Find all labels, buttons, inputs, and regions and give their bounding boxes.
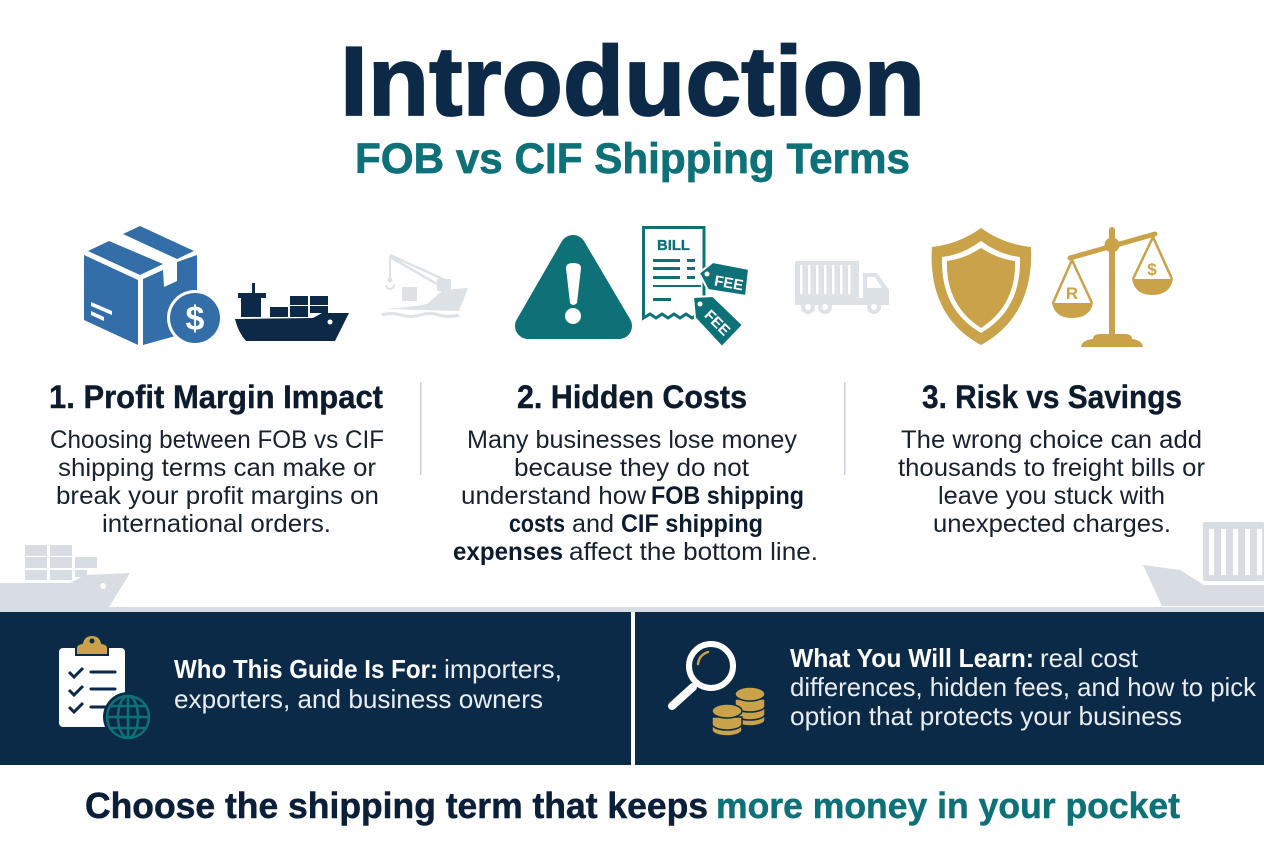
text block: hidden costs xyxy=(453,426,818,566)
text block: risk vs savings: thousands to freight bills or xyxy=(898,454,1205,482)
text block: profit margin impact: shipping terms can make or xyxy=(58,454,376,482)
panel: what you will learn xyxy=(635,612,1264,765)
heading: hidden costs: 2. Hidden Costs xyxy=(517,379,747,415)
subtitle: FOB vs CIF Shipping Terms xyxy=(355,135,910,183)
text block: hidden costs: expenses xyxy=(453,538,563,566)
icon: bill with fee tags: FEE xyxy=(713,273,745,294)
text block: what you will learn: option that protects your business xyxy=(790,701,1182,731)
text block: profit margin impact: break your profit margins on xyxy=(56,482,379,510)
icon: box with dollar coin: $ xyxy=(186,300,205,338)
title: Introduction xyxy=(340,26,925,136)
icon: balance scales: $ xyxy=(1147,260,1157,279)
panel: hidden costs xyxy=(453,379,818,566)
icon: box with dollar coin xyxy=(84,226,223,346)
text block: who this guide is for: Who This Guide Is For: xyxy=(174,654,438,684)
text block: what you will learn: real cost xyxy=(1040,643,1139,673)
text block: profit margin impact: Choosing between FOB vs CIF xyxy=(50,426,384,454)
icon: clipboard with globe xyxy=(59,635,153,742)
panel: profit margin impact xyxy=(49,379,384,538)
text block: hidden costs: CIF shipping xyxy=(621,510,763,538)
text block: hidden costs: because they do not xyxy=(514,454,749,482)
icon: bill with fee tags: FEE xyxy=(701,307,733,339)
text block: hidden costs: Many businesses lose money xyxy=(467,426,797,454)
text block: risk vs savings: leave you stuck with xyxy=(938,482,1165,510)
text block: risk vs savings: The wrong choice can add xyxy=(901,426,1202,454)
text block: profit margin impact xyxy=(50,426,384,538)
text block: hidden costs: affect the bottom line. xyxy=(569,538,818,566)
panel: who this guide is for xyxy=(0,612,631,765)
illustration: faded ship left xyxy=(0,545,130,607)
bottom call to action xyxy=(85,785,1180,826)
icon: bill with fee tags: BILL xyxy=(657,237,690,254)
icon: container ship xyxy=(235,283,349,341)
text block: what you will learn: What You Will Learn: xyxy=(790,643,1034,673)
bottom call to action: Choose the shipping term that keeps xyxy=(85,785,708,826)
text block: hidden costs: costs xyxy=(509,510,565,538)
icon: bill with fee tags xyxy=(644,228,749,347)
heading: profit margin impact: 1. Profit Margin Impact xyxy=(49,379,383,415)
illustration: faded ship right xyxy=(1143,522,1264,606)
text block: who this guide is for: importers, xyxy=(444,654,562,684)
text block: what you will learn xyxy=(790,643,1257,731)
text block: risk vs savings: unexpected charges. xyxy=(933,510,1171,538)
icon: crane ship faded xyxy=(382,255,468,316)
icon: balance scales: R xyxy=(1066,284,1078,303)
text block: hidden costs: FOB shipping xyxy=(651,482,804,510)
text block: who this guide is for: exporters, and business owners xyxy=(174,684,543,714)
bottom call to action: more money in your pocket xyxy=(716,785,1180,826)
text block: profit margin impact: international orders. xyxy=(102,510,331,538)
icon: shield xyxy=(932,228,1031,345)
text block: risk vs savings xyxy=(898,426,1205,538)
text block: hidden costs: and xyxy=(572,510,614,538)
icon: warning triangle xyxy=(528,248,619,326)
panel: risk vs savings xyxy=(898,379,1205,538)
text block: who this guide is for xyxy=(174,654,562,714)
icon: truck faded xyxy=(795,261,889,314)
text block: what you will learn: differences, hidden fees, and how to pick xyxy=(790,672,1257,702)
icon: magnifier with coins xyxy=(672,644,765,736)
icon: balance scales xyxy=(1052,227,1173,347)
heading: risk vs savings: 3. Risk vs Savings xyxy=(922,379,1182,415)
text block: hidden costs: understand how xyxy=(461,482,647,510)
